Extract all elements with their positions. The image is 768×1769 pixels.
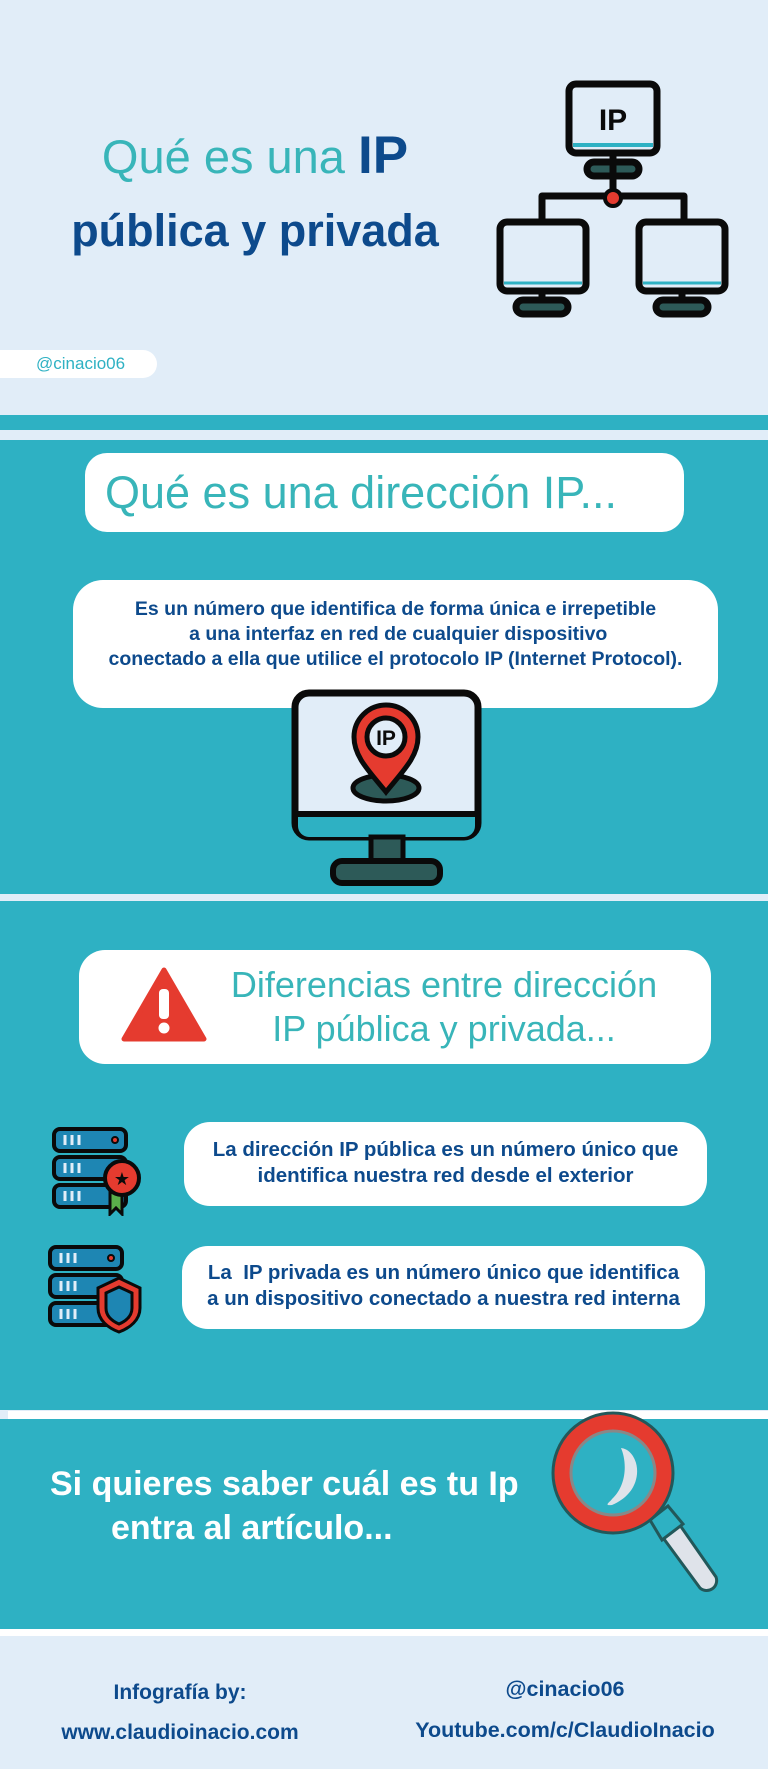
footer: right credits <box>415 1677 715 1742</box>
text block: definition: a una interfaz en red de cualquier dispositivo <box>189 623 607 645</box>
text block: definition: conectado a ella que utilice el protocolo IP (Internet Protocol). <box>109 648 682 670</box>
handle pill: @cinacio06 <box>36 354 125 373</box>
band: teal top strip <box>0 415 768 430</box>
callout: cta text: Si quieres saber cuál es tu Ip <box>50 1465 519 1503</box>
title <box>71 126 440 256</box>
title: pública y privada <box>71 205 439 256</box>
heading text: Diferencias entre dirección <box>231 964 657 1005</box>
heading: que es una direccion IP: Qué es una dirección IP... <box>105 467 617 518</box>
text block: IP privada: La IP privada es un número único que identifica <box>208 1261 679 1284</box>
text block: IP publica: identifica nuestra red desde el exterior <box>258 1164 633 1187</box>
icon: server with badge <box>52 1127 141 1216</box>
text block: IP privada <box>182 1246 705 1329</box>
footer: left credits: www.claudioinacio.com <box>61 1721 299 1744</box>
callout: cta text: entra al artículo... <box>111 1509 393 1547</box>
footer: left credits <box>61 1681 299 1744</box>
text block: definition <box>73 580 718 708</box>
heading text: IP pública y privada... <box>272 1008 616 1049</box>
band: footer separator <box>0 1629 768 1636</box>
footer: right credits: Youtube.com/c/ClaudioInacio <box>415 1718 715 1742</box>
text block: IP publica <box>184 1122 707 1206</box>
icon: magnifier <box>552 1412 718 1592</box>
title: Qué es una IP <box>102 126 408 185</box>
icon: monitor with IP pin <box>292 690 482 886</box>
heading: diferencias <box>79 950 711 1064</box>
panel: diferencias <box>0 901 768 1410</box>
icon: network of computers: IP <box>599 104 627 137</box>
icon: server with badge: ★ <box>114 1169 130 1189</box>
heading: que es una direccion IP <box>85 453 684 532</box>
panel: que es IP <box>0 440 768 894</box>
icon: monitor with IP pin: IP <box>376 727 396 750</box>
text block: IP privada: a un dispositivo conectado a nuestra red interna <box>207 1287 680 1310</box>
panel: cta <box>0 1419 768 1629</box>
callout: cta text <box>50 1465 519 1547</box>
icon: server with shield <box>48 1245 142 1334</box>
icon: network of computers <box>496 80 728 318</box>
text block: IP publica: La dirección IP pública es un número único que <box>213 1138 678 1161</box>
handle pill <box>0 350 157 378</box>
footer: left credits: Infografía by: <box>113 1681 246 1704</box>
heading text <box>231 964 657 1049</box>
divider white line <box>8 1411 768 1419</box>
text block: definition: Es un número que identifica de forma única e irrepetible <box>135 598 656 620</box>
icon: warning <box>122 968 206 1042</box>
footer: right credits: @cinacio06 <box>506 1677 624 1701</box>
